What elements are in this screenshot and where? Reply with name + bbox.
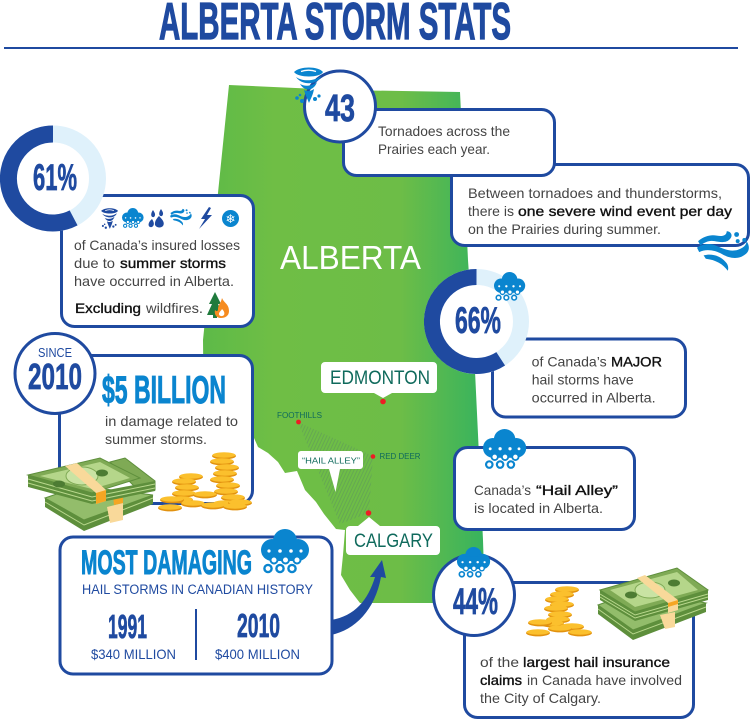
callout: Hail Alley: “HAIL ALLEY” — [302, 456, 360, 466]
icon: wind — [697, 231, 749, 271]
panel: insured losses: wildfires. — [145, 300, 203, 316]
panel: $5 billion damage: in damage related to — [105, 413, 238, 429]
panel: insured losses — [8, 134, 253, 326]
icon: hail cloud — [457, 547, 490, 577]
panel: tornadoes: Tornadoes across the — [378, 123, 510, 139]
panel: 66% major hail storms: MAJOR — [611, 354, 662, 370]
panel: tornadoes — [344, 110, 554, 176]
panel: hail alley: Canada’s — [474, 482, 531, 498]
icon: hail cloud — [483, 429, 526, 468]
panel: most damaging hail storms: MOST DAMAGING — [81, 544, 252, 582]
callout: Calgary — [346, 510, 440, 555]
stat: 1991: $340 MILLION — [91, 646, 176, 662]
hail alley hatched zone — [298, 422, 373, 524]
icon: gold coins — [158, 452, 252, 511]
stat: 2010: $400 MILLION — [215, 646, 300, 662]
stat circle: since 2010: SINCE — [38, 346, 72, 360]
callout: Calgary: CALGARY — [354, 531, 433, 552]
panel: 44% hail insurance claims: claims — [480, 672, 522, 688]
callout: Edmonton — [321, 362, 437, 404]
icon: cash stacks — [28, 458, 155, 531]
panel: insured losses: have occurred in Alberta. — [74, 273, 234, 289]
donut: 61% — [8, 134, 97, 223]
panel: $5 billion damage: summer storms. — [105, 431, 207, 447]
donut: 66%: 66% — [455, 300, 501, 341]
stat: 2010 — [215, 607, 300, 662]
stat: 1991 — [91, 608, 176, 662]
panel: tornadoes: Prairies each year. — [378, 141, 490, 157]
icon: cash stacks — [598, 568, 708, 640]
panel: hail alley — [454, 429, 634, 530]
stat circle: 43: 43 — [325, 88, 355, 130]
icon: wildfire — [207, 292, 229, 318]
panel: 66% major hail storms: occurred in Alberta. — [532, 390, 656, 406]
stat: 1991: 1991 — [108, 608, 147, 645]
stat circle: since 2010: 2010 — [28, 356, 82, 397]
panel: insured losses: due to — [74, 255, 115, 271]
panel: insured losses: of Canada’s insured losses — [74, 237, 240, 253]
donut: 66% — [432, 277, 521, 366]
panel: 44% hail insurance claims: of the — [480, 654, 519, 670]
stat circle: since 2010 — [15, 334, 95, 414]
callout: Hail Alley — [298, 451, 363, 492]
panel: insured losses: Excluding — [75, 300, 141, 316]
storm type icons: ❄ — [225, 212, 236, 226]
panel: severe wind events — [452, 164, 749, 271]
stat: 2010: 2010 — [237, 607, 280, 644]
panel: most damaging hail storms: HAIL STORMS IN CANADIAN HISTORY — [82, 582, 313, 597]
panel: 44% hail insurance claims: in Canada have involved — [527, 672, 682, 688]
panel: severe wind events: on the Prairies during summer. — [468, 221, 661, 237]
panel: severe wind events: Between tornadoes and thunderstorms, — [468, 185, 722, 201]
panel: 44% hail insurance claims: largest hail insurance — [523, 654, 670, 670]
icon: hail cloud — [261, 529, 309, 572]
panel: hail alley: is located in Alberta. — [474, 500, 603, 516]
city: Red Deer: RED DEER — [380, 451, 420, 461]
panel: tornado count and wind events — [294, 68, 749, 271]
map of Alberta — [203, 85, 485, 603]
map label: Alberta: ALBERTA — [280, 239, 421, 276]
panel: hail alley: “Hail Alley” — [536, 482, 618, 498]
arrow: to Calgary — [331, 560, 386, 635]
stat circle: 44%: 44% — [453, 581, 498, 622]
icon: gold coins — [526, 586, 592, 636]
city: Foothills: FOOTHILLS — [277, 411, 322, 420]
city: Foothills — [277, 411, 322, 424]
panel: 66% major hail storms — [432, 272, 686, 417]
panel: 44% hail insurance claims — [434, 547, 708, 718]
stat circle: 43 — [304, 71, 376, 142]
panel: 44% hail insurance claims: the City of Calgary. — [480, 690, 601, 706]
callout: Edmonton: EDMONTON — [330, 368, 430, 389]
stat circle: 44% — [434, 554, 514, 636]
panel: insured losses: summer storms — [120, 255, 226, 271]
panel: most damaging hail storms — [60, 529, 332, 674]
panel: severe wind events: one severe wind event per day — [518, 203, 732, 219]
icon: hail cloud — [494, 272, 525, 300]
panel: 66% major hail storms: of Canada’s — [532, 354, 607, 370]
panel: severe wind events: there is — [468, 203, 514, 219]
panel: $5 billion damage: $5 BILLION — [102, 369, 226, 412]
donut: 61%: 61% — [33, 157, 77, 198]
panel: $5 billion damage — [15, 334, 252, 531]
icon: tornado — [294, 68, 323, 103]
storm type icons — [101, 207, 239, 229]
panel: 66% major hail storms: hail storms have — [532, 372, 634, 388]
